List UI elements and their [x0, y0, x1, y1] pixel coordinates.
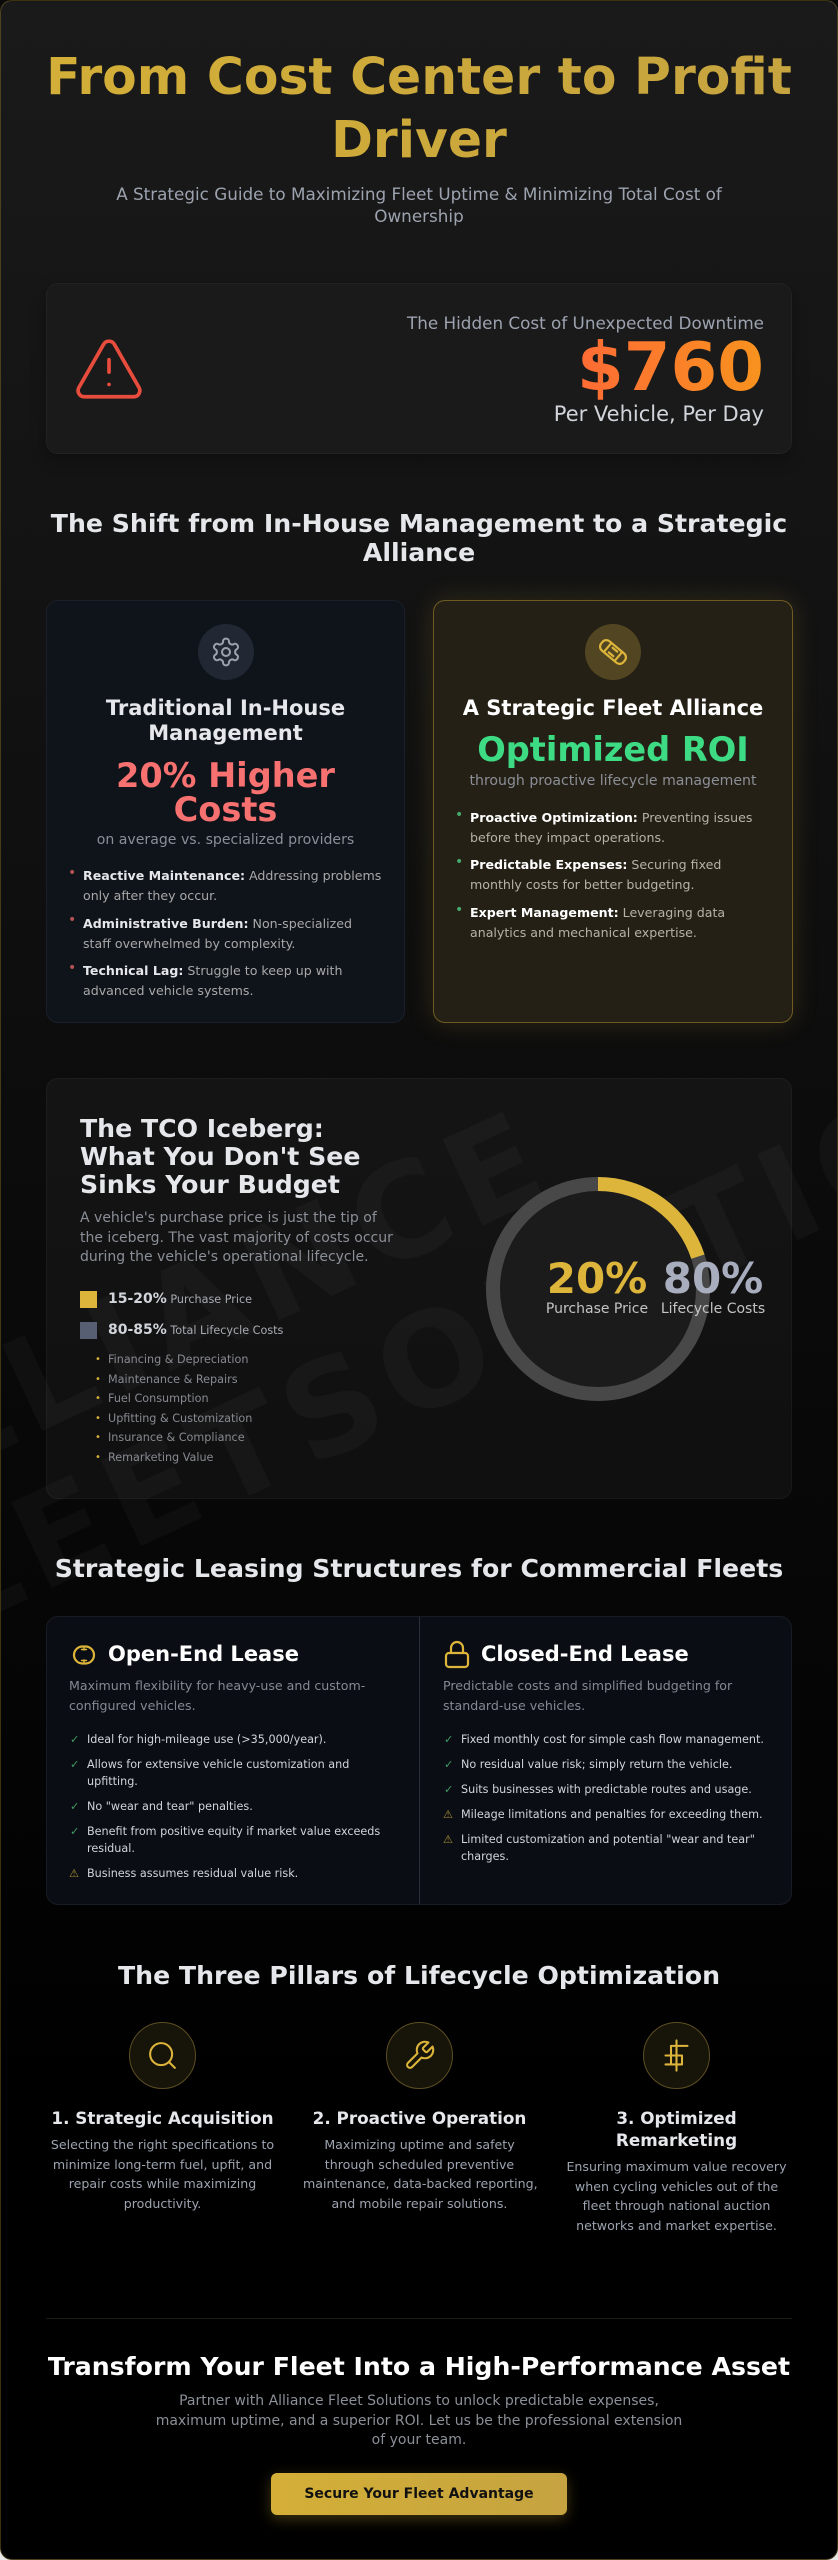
- alert figure: $760: [577, 328, 764, 406]
- lifecycle cost list: Upfitting & Customization: [108, 1412, 252, 1425]
- lifecycle cost list: Maintenance & Repairs: [108, 1373, 238, 1386]
- heading: leasing: Strategic Leasing Structures for Commercial Fleets: [55, 1554, 783, 1583]
- donut stat: purchase: Purchase Price: [546, 1301, 648, 1317]
- TCO paragraph: A vehicle's purchase price is just the tip of: [80, 1210, 377, 1226]
- panel: TCO iceberg: [46, 1078, 792, 1499]
- card stat: Optimized ROI: [477, 730, 749, 769]
- panel: strategic alliance: •: [455, 902, 463, 918]
- panel: lease comparison: ⚠: [69, 1867, 79, 1880]
- alert label: The Hidden Cost of Unexpected Downtime: [407, 313, 764, 333]
- TCO heading: Sinks Your Budget: [80, 1170, 340, 1199]
- panel: lease comparison: residual.: [87, 1842, 135, 1855]
- donut stat: lifecycle: 80%: [663, 1254, 763, 1303]
- card note: on average vs. specialized providers: [97, 832, 354, 848]
- donut stat: lifecycle: Lifecycle Costs: [661, 1301, 765, 1317]
- heading: the shift: The Shift from In-House Management to a Strategic: [51, 509, 787, 538]
- legend: purchase price: [80, 1291, 252, 1308]
- panel: traditional in-house: Technical Lag: Struggle to keep up with: [83, 963, 342, 978]
- pillar heading: 2. Proactive Operation: [313, 2108, 526, 2128]
- list: problems: Reactive Maintenance: Addressing problems: [83, 868, 381, 883]
- panel: lease comparison: Mileage limitations and penalties for exceeding them.: [461, 1808, 763, 1821]
- title: From Cost Center to Profit: [46, 47, 792, 106]
- pillar text: Selecting the right specifications to: [51, 2137, 274, 2152]
- green bullets: •: [455, 807, 463, 823]
- TCO paragraph: the iceberg. The vast majority of costs occur: [80, 1230, 393, 1246]
- panel: traditional in-house: advanced vehicle systems.: [83, 983, 253, 998]
- donut stat: purchase: 20%: [547, 1254, 647, 1303]
- card heading: A Strategic Fleet Alliance: [463, 696, 763, 720]
- open-end description: Maximum flexibility for heavy-use and custom-: [69, 1678, 365, 1693]
- icon: search: [129, 2022, 196, 2089]
- panel: lease comparison: Benefit from positive equity if market value exceeds: [87, 1825, 380, 1838]
- panel: lease comparison: ⚠: [443, 1808, 453, 1821]
- icon: dollar: [643, 2022, 710, 2089]
- panel: lease comparison: No "wear and tear" penalties.: [87, 1800, 253, 1813]
- pillar text: productivity.: [124, 2196, 201, 2211]
- icon: open-end ring: [72, 1645, 96, 1665]
- TCO heading: What You Don't See: [80, 1142, 360, 1171]
- panel: strategic alliance: analytics and mechanical expertise.: [470, 925, 697, 940]
- heading: closed-end: Closed-End Lease: [481, 1642, 689, 1666]
- panel: TCO iceberg: 15-20% Purchase Price: [108, 1291, 252, 1307]
- subtitle: A Strategic Guide to Maximizing Fleet Uptime & Minimizing Total Cost of: [116, 184, 722, 204]
- gold bullets: •: [95, 1413, 101, 1424]
- icon: wrench: [386, 2022, 453, 2089]
- pillar heading: Remarketing: [616, 2130, 737, 2150]
- divider: [46, 2318, 792, 2319]
- card stat: Costs: [174, 790, 277, 829]
- pillar text: and mobile repair solutions.: [332, 2196, 507, 2211]
- pillar heading: 3. Optimized: [616, 2108, 737, 2128]
- open-end description: [69, 1678, 365, 1713]
- call to action text: [156, 2393, 682, 2448]
- call to action text: Partner with Alliance Fleet Solutions to unlock predictable expenses,: [179, 2393, 659, 2409]
- title: [1, 46, 837, 171]
- pillar text: networks and market expertise.: [576, 2218, 777, 2233]
- icon: warning triangle: [76, 339, 142, 399]
- panel: lease comparison: No residual value risk; simply return the vehicle.: [461, 1758, 732, 1771]
- panel: TCO iceberg: 80-85% Total Lifecycle Costs: [108, 1322, 283, 1338]
- pillar 3: remarketing: [566, 2022, 787, 2233]
- closed-end description: Predictable costs and simplified budgeting for: [443, 1678, 732, 1693]
- panel: traditional in-house: [46, 600, 405, 1023]
- pillar text: [51, 2137, 274, 2211]
- legend: lifecycle costs: [80, 1322, 283, 1339]
- call to action text: maximum uptime, and a superior ROI. Let us be the professional extension: [156, 2413, 682, 2429]
- lifecycle cost list: Fuel Consumption: [108, 1392, 209, 1405]
- list: benefits: before they impact operations.: [470, 830, 665, 845]
- pillar text: fleet through national auction: [583, 2198, 770, 2213]
- card heading: [106, 696, 345, 745]
- TCO heading: The TCO Iceberg:: [80, 1114, 324, 1143]
- TCO heading: [80, 1114, 360, 1199]
- gold bullets: •: [95, 1393, 101, 1404]
- panel: lease comparison: [46, 1616, 792, 1905]
- closed-end description: standard-use vehicles.: [443, 1698, 585, 1713]
- panel: lease comparison: ✓: [444, 1758, 453, 1771]
- lifecycle cost list: Insurance & Compliance: [108, 1431, 245, 1444]
- panel: traditional in-house: Administrative Burden: Non-specialized: [83, 916, 352, 931]
- panel: traditional in-house: staff overwhelmed by complexity.: [83, 936, 295, 951]
- panel: lease comparison: ✓: [444, 1783, 453, 1796]
- red bullets: •: [68, 865, 76, 881]
- pillar text: minimize long-term fuel, upfit, and: [53, 2157, 272, 2172]
- list: problems: only after they occur.: [83, 888, 217, 903]
- pillar text: when cycling vehicles out of the: [575, 2179, 778, 2194]
- pillar text: Maximizing uptime and safety: [324, 2137, 515, 2152]
- panel: lease comparison: ✓: [70, 1800, 79, 1813]
- pillar text: maintenance, data-backed reporting,: [303, 2176, 538, 2191]
- list: problems: [83, 868, 381, 903]
- panel: downtime alert: [46, 283, 792, 454]
- card stat: 20% Higher: [116, 756, 335, 795]
- panel: lease comparison: ✓: [70, 1825, 79, 1838]
- card stat: [116, 756, 335, 829]
- panel: lease comparison: Limited customization and potential "wear and tear": [461, 1833, 755, 1846]
- column divider: [419, 1617, 420, 1904]
- panel: traditional in-house: •: [68, 912, 76, 928]
- list: benefits: Proactive Optimization: Preventing issues: [470, 810, 752, 825]
- donut chart: [486, 1177, 710, 1401]
- panel: traditional in-house: •: [68, 960, 76, 976]
- call to action heading: Transform Your Fleet Into a High-Performance Asset: [48, 2352, 790, 2381]
- subtitle: Ownership: [374, 206, 464, 226]
- pillar text: [566, 2159, 787, 2233]
- icon: gear: [198, 624, 254, 680]
- pillar text: Ensuring maximum value recovery: [566, 2159, 787, 2174]
- TCO paragraph: [80, 1210, 393, 1265]
- button: [271, 2473, 567, 2515]
- lifecycle cost list: [108, 1353, 252, 1464]
- panel: strategic alliance: [433, 600, 793, 1023]
- TCO paragraph: during the vehicle's operational lifecycle.: [80, 1249, 369, 1265]
- pillar heading: 1. Strategic Acquisition: [51, 2108, 274, 2128]
- heading: the shift: [50, 509, 787, 567]
- gold bullets: •: [95, 1374, 101, 1385]
- call to action text: of your team.: [372, 2432, 466, 2448]
- gold bullets: •: [95, 1432, 101, 1443]
- panel: strategic alliance: monthly costs for better budgeting.: [470, 877, 695, 892]
- heading: three pillars: The Three Pillars of Lifecycle Optimization: [118, 1961, 720, 1990]
- pillar 1: acquisition: [51, 2022, 274, 2211]
- panel: lease comparison: ⚠: [443, 1833, 453, 1846]
- panel: strategic alliance: Expert Management: Leveraging data: [470, 905, 725, 920]
- pillar text: repair costs while maximizing: [69, 2176, 256, 2191]
- panel: lease comparison: ✓: [70, 1758, 79, 1771]
- title: Driver: [331, 110, 507, 168]
- icon: padlock: [444, 1640, 470, 1668]
- card heading: Management: [148, 721, 303, 745]
- open-end list: Ideal for high-mileage use (>35,000/year).: [87, 1733, 326, 1746]
- closed-end list: Fixed monthly cost for simple cash flow management.: [461, 1733, 764, 1746]
- subtitle: [116, 184, 722, 226]
- panel: strategic alliance: Predictable Expenses: Securing fixed: [470, 857, 721, 872]
- pillar text: through scheduled preventive: [325, 2157, 514, 2172]
- heading: the shift: Alliance: [363, 538, 475, 567]
- pillar 2: operation: [303, 2022, 538, 2211]
- list: benefits: [470, 810, 752, 845]
- gold bullets: [95, 1354, 101, 1463]
- panel: lease comparison: upfitting.: [87, 1775, 138, 1788]
- card note: through proactive lifecycle management: [469, 773, 756, 789]
- heading: open-end: Open-End Lease: [108, 1642, 299, 1666]
- panel: lease comparison: charges.: [461, 1850, 509, 1863]
- lifecycle cost list: Financing & Depreciation: [108, 1353, 248, 1366]
- closed-end description: [443, 1678, 732, 1713]
- open-end marks: ✓: [70, 1733, 79, 1746]
- lifecycle cost list: Remarketing Value: [108, 1451, 213, 1464]
- panel: lease comparison: Business assumes residual value risk.: [87, 1867, 298, 1880]
- closed-end marks: ✓: [444, 1733, 453, 1746]
- gold bullets: •: [95, 1354, 101, 1365]
- pillar text: [303, 2137, 538, 2211]
- pillar heading: [616, 2108, 737, 2150]
- icon: handshake: [585, 624, 641, 680]
- open-end description: configured vehicles.: [69, 1698, 196, 1713]
- button: Secure Your Fleet Advantage: [304, 2486, 534, 2502]
- panel: lease comparison: Allows for extensive vehicle customization and: [87, 1758, 349, 1771]
- panel: strategic alliance: •: [455, 854, 463, 870]
- panel: lease comparison: Suits businesses with predictable routes and usage.: [461, 1783, 752, 1796]
- card heading: Traditional In-House: [106, 696, 345, 720]
- gold bullets: •: [95, 1452, 101, 1463]
- alert unit: Per Vehicle, Per Day: [554, 402, 764, 426]
